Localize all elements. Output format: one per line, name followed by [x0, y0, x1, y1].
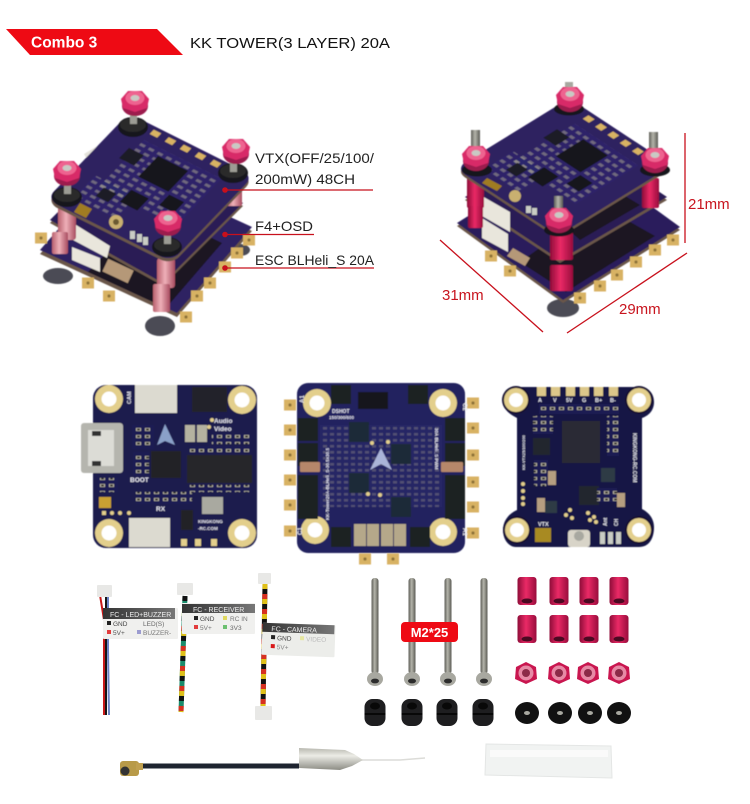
- title banner: Combo 3: Combo 3: [31, 34, 98, 52]
- label: 5V+: [200, 625, 212, 632]
- board text: 150/300/600: [329, 415, 355, 420]
- board: flight controller: [81, 385, 257, 548]
- board text: KINGKONG: [198, 519, 223, 524]
- upper white connector: [73, 223, 110, 258]
- board text: Video: [214, 426, 232, 433]
- top board: [46, 113, 254, 265]
- cable: receiver: [177, 583, 255, 712]
- callout text: F4+OSD: [255, 219, 313, 234]
- product photo: right stack with dimensions: [440, 82, 730, 333]
- label: [182, 603, 255, 634]
- board text: Audio: [214, 418, 232, 425]
- ESC board: [35, 164, 255, 322]
- board text: A1: [461, 528, 467, 536]
- label: 3V3: [230, 625, 242, 632]
- board text: A: [538, 398, 542, 404]
- label: LED(S): [143, 621, 164, 628]
- board text: C2: [461, 403, 467, 411]
- red spacers: [518, 577, 628, 643]
- board text: [521, 398, 637, 528]
- board text: DSHOT: [332, 409, 350, 415]
- dimension text: 29mm: [619, 301, 661, 318]
- cable: camera: [255, 573, 336, 720]
- lower white connector: [482, 218, 508, 252]
- board text: [127, 391, 232, 531]
- upper white connector: [482, 196, 510, 232]
- USB port: [81, 423, 123, 473]
- board text: [298, 395, 467, 536]
- size tag: M2*25: [401, 622, 458, 642]
- pads: [537, 387, 618, 396]
- screws: [367, 578, 492, 686]
- board text: BOOT: [130, 477, 149, 484]
- USB socket: [509, 122, 537, 144]
- components: [81, 385, 252, 547]
- label: GND: [200, 616, 215, 623]
- label: GND: [277, 635, 292, 643]
- cable: LED and buzzer: [97, 585, 178, 715]
- lower white connector: [72, 247, 100, 272]
- heading: KK TOWER: KK TOWER(3 LAYER) 20A: [190, 36, 390, 52]
- board text: VTX: [538, 522, 549, 528]
- rubbers and nuts: [52, 91, 250, 257]
- top board: [455, 98, 672, 238]
- product photo: left stack with callouts: [35, 91, 375, 336]
- rubbers, nuts and bolts: [462, 82, 670, 236]
- stack photo: [35, 91, 255, 336]
- label: BUZZER-: [143, 630, 171, 637]
- callout lines: [223, 188, 374, 270]
- red lock nuts: [515, 662, 630, 684]
- label: RC IN: [230, 616, 248, 623]
- board text: 5V: [566, 398, 573, 404]
- label: FC - CAMERA: [271, 626, 317, 635]
- dimension text: [442, 196, 730, 318]
- motor pads: [284, 398, 479, 564]
- title banner: Combo 3: [6, 29, 183, 55]
- board text: -RC.COM: [198, 526, 218, 531]
- bottom foot: [547, 299, 579, 317]
- middle board: [465, 134, 667, 263]
- label: FC - RECEIVER: [193, 607, 244, 614]
- dimension text: 21mm: [688, 196, 730, 213]
- board text: CAM: [127, 391, 133, 404]
- callout text: VTX(OFF/25/100/: [255, 151, 374, 166]
- dimension lines: [440, 133, 687, 333]
- board text: KK-Tower20A-BLHeli_S-30.5x30.5: [325, 448, 330, 520]
- rubber grommets: [364, 699, 494, 726]
- callout text: [255, 151, 375, 268]
- components: [521, 404, 625, 547]
- board text: 30A BLHeli_S PWM: [434, 428, 439, 470]
- red standoffs: [467, 176, 659, 291]
- ESC board: [457, 150, 680, 304]
- callout text: 200mW) 48CH: [255, 172, 355, 187]
- stack photo: [455, 82, 680, 317]
- board text: RX: [156, 506, 166, 513]
- board text: V: [553, 398, 557, 404]
- board text: B+: [595, 398, 602, 404]
- size tag: M2*25: M2*25: [411, 625, 448, 640]
- middle board: [50, 140, 243, 286]
- antenna: [120, 748, 425, 776]
- label: VIDEO: [306, 636, 326, 644]
- board text: KK-VTX25/100/200: [521, 434, 526, 470]
- label: 5V+: [113, 630, 125, 637]
- board text: CH: [614, 518, 620, 526]
- board: VTX: [502, 386, 654, 547]
- USB socket: [84, 142, 114, 172]
- callout text: ESC BLHeli_S 20A: [255, 253, 375, 268]
- rubber feet: [43, 244, 250, 336]
- board text: KINGKONG-RC.COM: [631, 433, 637, 482]
- board text: Ant: [603, 517, 609, 526]
- board text: A1: [300, 395, 306, 403]
- label: GND: [113, 621, 128, 628]
- label: FC - LED+BUZZER: [110, 612, 171, 619]
- black washers: [515, 702, 631, 724]
- board text: B-: [610, 398, 616, 404]
- standoffs: [52, 184, 242, 312]
- board text: G: [582, 398, 586, 404]
- label: [103, 608, 178, 639]
- board: 4-in-1 ESC: [284, 383, 479, 564]
- components: [298, 385, 465, 547]
- heat shrink tube: [485, 744, 612, 778]
- board text: C1: [298, 527, 304, 535]
- label: 5V+: [277, 644, 289, 652]
- dimension text: 31mm: [442, 287, 484, 304]
- label: [261, 623, 336, 657]
